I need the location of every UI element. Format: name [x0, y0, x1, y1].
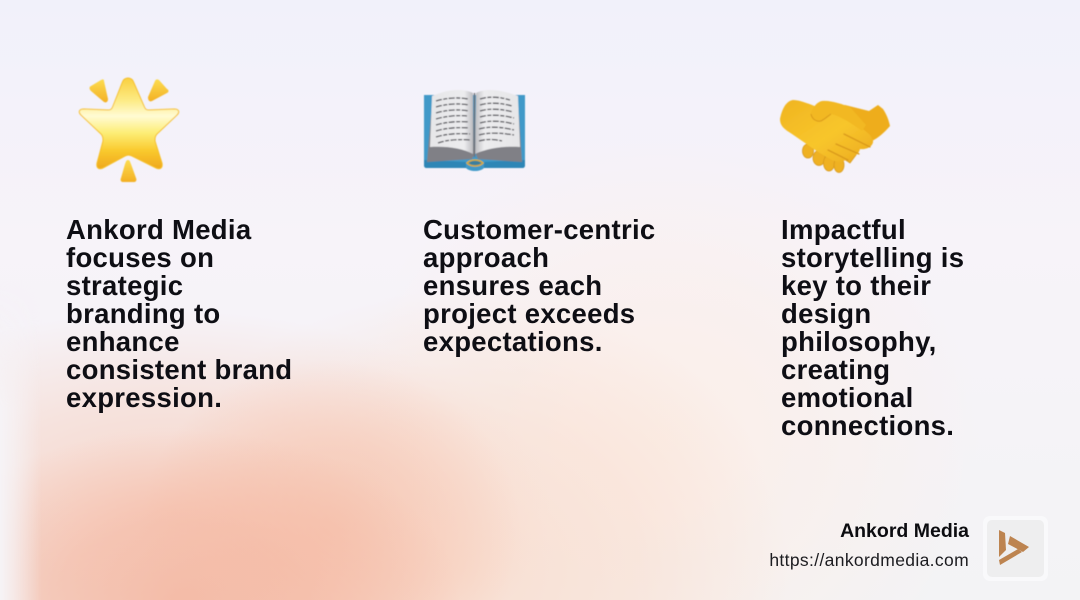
text block: impactful storytelling: philosophy, [781, 326, 937, 357]
text block: impactful storytelling: connections. [781, 410, 954, 441]
logo badge [999, 530, 1029, 565]
text block: customer-centric approach: project exceeds [423, 298, 635, 329]
text block: impactful storytelling [781, 214, 964, 441]
text block: customer-centric approach: approach [423, 242, 549, 273]
page blocks [427, 105, 474, 162]
text block: impactful storytelling: emotional [781, 382, 914, 413]
text block: impactful storytelling: Impactful [781, 214, 906, 245]
icon: glowing star [78, 76, 180, 183]
text block: strategic branding: strategic [66, 270, 183, 301]
text block: impactful storytelling: key to their [781, 270, 931, 301]
thumb [811, 101, 866, 131]
text block: customer-centric approach: ensures each [423, 270, 602, 301]
star body [79, 78, 179, 169]
sparkles [90, 79, 168, 182]
text block: strategic branding: enhance [66, 326, 180, 357]
text block: customer-centric approach [423, 214, 656, 357]
right page [475, 90, 520, 154]
text block: impactful storytelling: creating [781, 354, 890, 385]
text block: strategic branding: consistent brand [66, 354, 292, 385]
text block: customer-centric approach: expectations. [423, 326, 603, 357]
icon: open book [423, 90, 526, 172]
logo mark [999, 530, 1029, 565]
fingers [802, 144, 856, 172]
website url: https://ankordmedia.com [769, 550, 969, 570]
text block: impactful storytelling: design [781, 298, 871, 329]
text block: strategic branding: branding to [66, 298, 221, 329]
left page [430, 90, 473, 154]
text block: customer-centric approach: Customer-centric [423, 214, 656, 245]
page text [436, 97, 514, 143]
text block: strategic branding [66, 214, 292, 413]
finger creases [828, 134, 870, 160]
icon: handshake [779, 99, 891, 174]
left hand [780, 100, 873, 162]
text block: impactful storytelling: storytelling is [781, 242, 964, 273]
right sleeve [830, 105, 890, 141]
cover [424, 95, 525, 171]
text block: strategic branding: expression. [66, 382, 222, 413]
ribbon [467, 160, 483, 166]
text block: strategic branding: focuses on [66, 242, 214, 273]
brand name: Ankord Media [840, 520, 969, 542]
text block: strategic branding: Ankord Media [66, 214, 251, 245]
